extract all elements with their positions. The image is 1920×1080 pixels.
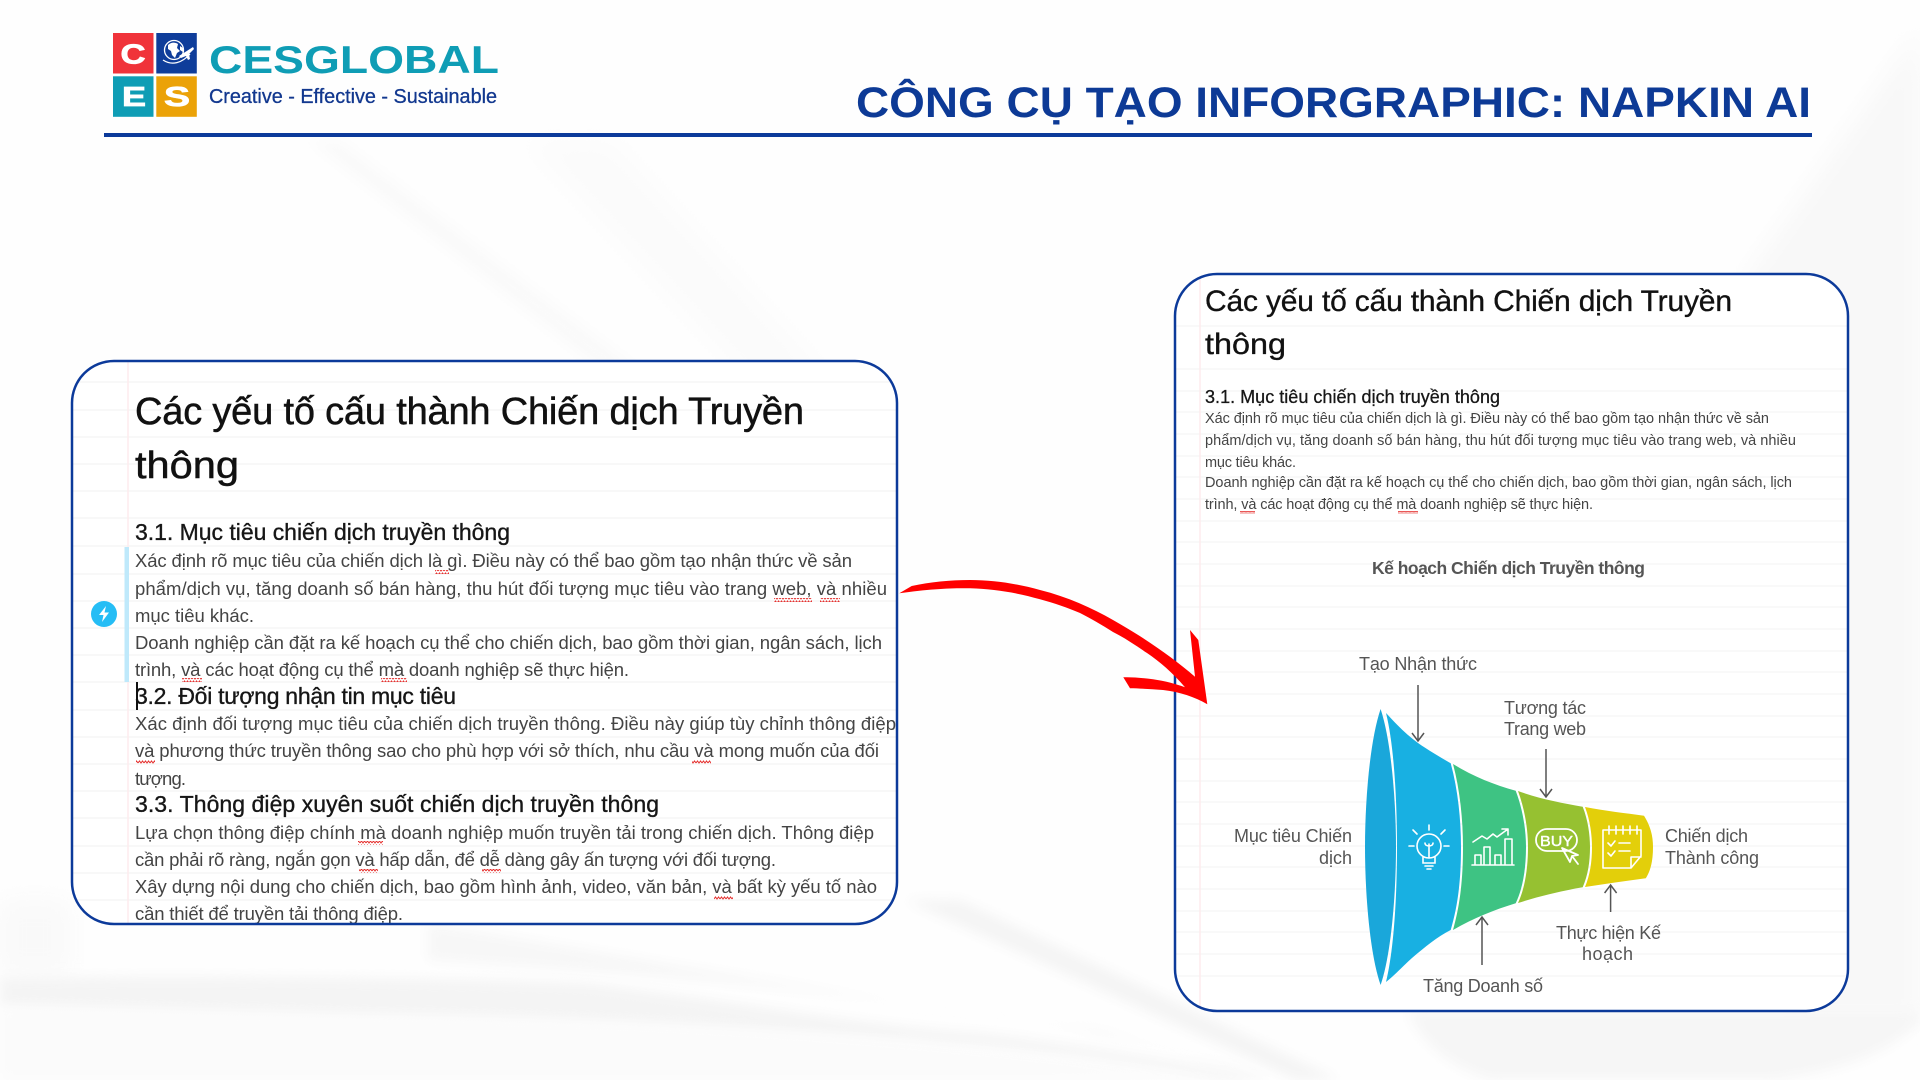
tagline: Creative - Effective - Sustainable	[209, 86, 497, 108]
label: campaign success: Chiến dịch	[1665, 826, 1748, 846]
label: execute plan: Thực hiện Kế	[1556, 923, 1661, 943]
icon: growth chart	[1472, 829, 1514, 865]
spell-check squiggles	[136, 570, 840, 900]
section 3.3: 3.3. Thông điệp xuyên suốt chiến dịch truyền thông	[135, 791, 659, 817]
section body text	[1205, 411, 1796, 513]
label: execute plan	[1556, 923, 1661, 964]
label: campaign goal: dịch	[1319, 848, 1352, 868]
label: campaign goal: Mục tiêu Chiến	[1234, 826, 1352, 846]
label: awareness: Tạo Nhận thức	[1359, 654, 1477, 674]
document heading: thông	[135, 445, 239, 487]
section 3.1	[135, 519, 887, 680]
document heading: thông	[1205, 328, 1286, 361]
section 3.1: mục tiêu khác.	[135, 605, 254, 626]
section 3.2: tượng.	[135, 768, 186, 789]
section 3.2: 3.2. Đối tượng nhận tin mục tiêu	[135, 683, 456, 709]
arrow: increase sales	[1476, 917, 1488, 965]
panel border	[72, 361, 897, 924]
logo mark: C tile	[113, 33, 154, 74]
label: campaign success	[1665, 826, 1759, 868]
section 3.1: Doanh nghiệp cần đặt ra kế hoạch cụ thể cho chiến dịch, bao gồm thời gian, ngân sách, lịch	[135, 632, 882, 653]
logo mark: globe tile	[156, 33, 197, 74]
section 3.1: 3.1. Mục tiêu chiến dịch truyền thông	[135, 519, 510, 545]
section body text: trình, và các hoạt động cụ thể mà doanh nghiệp sẽ thực hiện.	[1205, 497, 1593, 513]
icon: checklist calendar	[1603, 826, 1641, 868]
arrow: website engagement	[1540, 749, 1552, 797]
arrow: execute plan	[1605, 885, 1617, 912]
icon: buy button and cursor: BUY	[1540, 833, 1573, 850]
funnel segment: yellow	[1585, 807, 1653, 887]
section heading 3.1: 3.1. Mục tiêu chiến dịch truyền thông	[1205, 387, 1500, 407]
highlight bar	[124, 547, 129, 682]
label: website engagement: Tương tác	[1504, 698, 1586, 718]
section body text: phẩm/dịch vụ, tăng doanh số bán hàng, thu hút đối tượng mục tiêu vào trang web, và nhiều	[1205, 433, 1796, 449]
section 3.3: Lựa chọn thông điệp chính mà doanh nghiệp muốn truyền tải trong chiến dịch. Thông điệp	[135, 822, 874, 843]
label: website engagement: Trang web	[1504, 719, 1586, 739]
section 3.3: Xây dựng nội dung cho chiến dịch, bao gồm hình ảnh, video, văn bản, và bất kỳ yếu tố nào	[135, 876, 877, 897]
section 3.3: cần thiết để truyền tải thông điệp.	[135, 903, 403, 924]
text caret	[136, 682, 138, 710]
section 3.1: trình, và các hoạt động cụ thể mà doanh nghiệp sẽ thực hiện.	[135, 659, 629, 680]
arrow: source to result	[899, 580, 1207, 704]
section 3.1: Xác định rõ mục tiêu của chiến dịch là gì. Điều này có thể bao gồm tạo nhận thức về sản	[135, 550, 852, 571]
document heading: Các yếu tố cấu thành Chiến dịch Truyền	[1205, 285, 1732, 318]
logo mark: E tile: E	[122, 81, 146, 112]
section 3.2: Xác định đối tượng mục tiêu của chiến dịch truyền thông. Điều này giúp tùy chỉnh thông điệp	[135, 713, 896, 734]
document heading: Các yếu tố cấu thành Chiến dịch Truyền	[135, 391, 804, 433]
section body text: mục tiêu khác.	[1205, 455, 1296, 471]
label: website engagement	[1504, 698, 1586, 739]
spell-check squiggles	[1240, 511, 1418, 514]
funnel segment: goal ellipse	[1365, 709, 1396, 985]
panel border	[1175, 274, 1848, 1011]
section 3.1: phẩm/dịch vụ, tăng doanh số bán hàng, thu hút đối tượng mục tiêu vào trang web, và nhiều	[135, 578, 887, 599]
icon: buy button and cursor	[1536, 829, 1578, 864]
icon: lightning badge	[91, 601, 117, 627]
panel: generated result	[1175, 274, 1848, 1011]
section 3.3: cần phải rõ ràng, ngắn gọn và hấp dẫn, để dễ dàng gây ấn tượng với đối tượng.	[135, 849, 776, 870]
document heading	[135, 391, 804, 487]
document heading	[1205, 285, 1732, 361]
page title: CÔNG CỤ TẠO INFORGRAPHIC: NAPKIN AI	[856, 78, 1811, 127]
logo mark: E tile	[113, 76, 154, 117]
label: increase sales: Tăng Doanh số	[1423, 976, 1543, 996]
label: execute plan: hoạch	[1582, 944, 1633, 964]
section 3.2: và phương thức truyền thông sao cho phù hợp với sở thích, nhu cầu và mong muốn của đối	[135, 740, 879, 761]
section 3.3	[135, 791, 877, 924]
funnel segment: green	[1453, 764, 1526, 930]
funnel chart title: Kế hoạch Chiến dịch Truyền thông	[1372, 558, 1645, 578]
icon: light bulb	[1409, 825, 1449, 869]
panel: source document	[72, 361, 897, 924]
logo mark: C tile: C	[120, 38, 146, 70]
label: campaign success: Thành công	[1665, 848, 1759, 868]
funnel chart	[1365, 709, 1653, 985]
arrow: awareness	[1412, 685, 1424, 741]
funnel segment: blue	[1386, 713, 1461, 982]
label: campaign goal	[1234, 826, 1352, 868]
section body text: Doanh nghiệp cần đặt ra kế hoạch cụ thể cho chiến dịch, bao gồm thời gian, ngân sách, lịch	[1205, 475, 1792, 491]
logo mark: S tile	[156, 76, 197, 117]
brand name: CESGLOBAL	[209, 39, 499, 82]
section body text: Xác định rõ mục tiêu của chiến dịch là gì. Điều này có thể bao gồm tạo nhận thức về sản	[1205, 411, 1769, 427]
document body text	[135, 519, 896, 924]
section 3.2	[135, 683, 896, 789]
funnel segment: lime	[1518, 791, 1590, 903]
logo mark: S tile: S	[164, 81, 190, 112]
logo	[113, 33, 499, 117]
